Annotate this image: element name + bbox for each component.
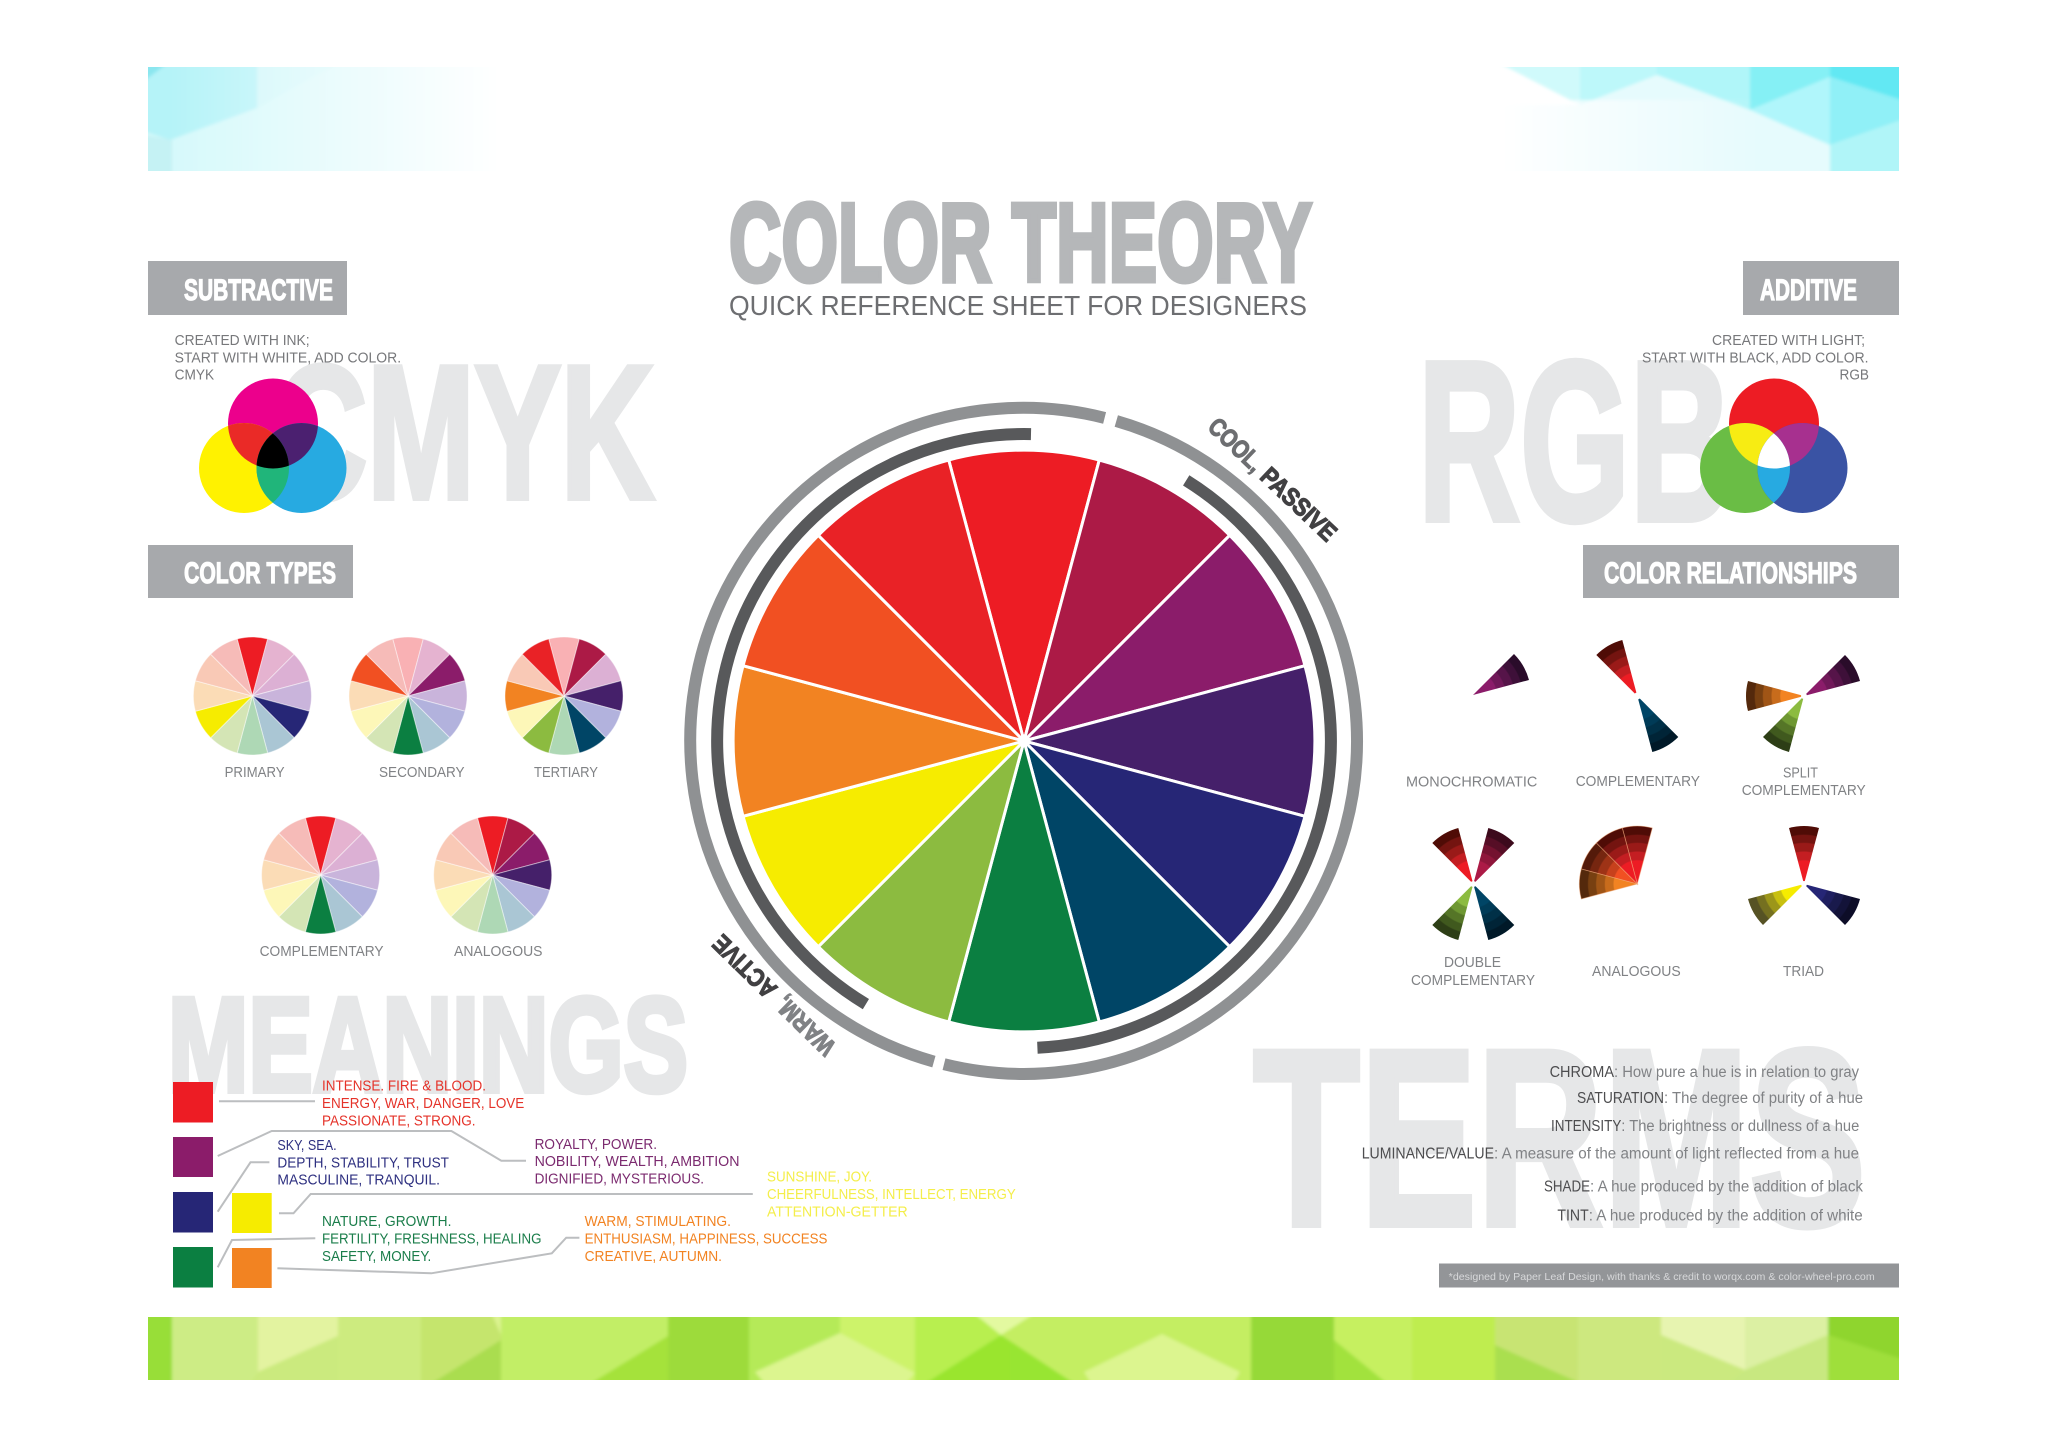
meaning text: yellow: SUNSHINE, JOY. (767, 1169, 872, 1186)
swatch: purple (173, 1137, 213, 1177)
meaning text: orange: ENTHUSIASM, HAPPINESS, SUCCESS (585, 1230, 827, 1247)
description: additive: START WITH BLACK, ADD COLOR. (1642, 350, 1868, 366)
description: subtractive: START WITH WHITE, ADD COLOR. (175, 350, 401, 366)
meaning text: yellow: CHEERFULNESS, INTELLECT, ENERGY (767, 1186, 1016, 1203)
credit bar (1439, 1264, 1899, 1288)
panel: subtractive (148, 261, 401, 513)
term: saturation (1577, 1090, 1863, 1107)
diagram: analogous: ANALOGOUS (1592, 963, 1681, 980)
meaning text: purple: DIGNIFIED, MYSTERIOUS. (535, 1170, 704, 1187)
description: additive: RGB (1840, 366, 1869, 384)
heading: color relationships (1583, 545, 1899, 598)
chart: complementary wheel (260, 816, 384, 960)
meaning text: yellow (767, 1169, 1016, 1221)
diagram: double complementary: COMPLEMENTARY (1411, 972, 1535, 989)
diagram: triad (1746, 826, 1862, 980)
meaning text: green (322, 1213, 542, 1265)
chart: complementary wheel: COMPLEMENTARY (260, 943, 384, 960)
meaning text: green: FERTILITY, FRESHNESS, HEALING (322, 1230, 542, 1247)
inner dark ring (717, 434, 1331, 1048)
chart: tertiary wheel (505, 637, 623, 781)
chart: analogous wheel: ANALOGOUS (454, 943, 542, 960)
description: additive (1642, 332, 1869, 384)
description: subtractive (175, 332, 401, 384)
meaning text: purple: NOBILITY, WEALTH, AMBITION (535, 1153, 740, 1170)
title (729, 181, 1312, 321)
ghost word: RGB: RGB (1418, 315, 1732, 569)
label: cool, passive: PASSIVE (1255, 462, 1342, 547)
swatch: green (173, 1247, 213, 1288)
meaning text: blue: MASCULINE, TRANQUIL. (277, 1171, 440, 1188)
meaning text: purple (535, 1136, 740, 1187)
swatch: blue (173, 1192, 213, 1232)
term: intensity: INTENSITY (1551, 1118, 1621, 1135)
chart: tertiary wheel: TERTIARY (534, 764, 598, 781)
meaning text: red: ENERGY, WAR, DANGER, LOVE (322, 1095, 524, 1112)
term: saturation: SATURATION (1577, 1090, 1664, 1107)
diagram: split complementary (1742, 654, 1866, 799)
diagram: monochromatic: MONOCHROMATIC (1406, 774, 1537, 791)
chart: primary wheel: PRIMARY (225, 764, 285, 781)
diagram: complementary (1576, 638, 1700, 790)
meaning text: yellow: ATTENTION-GETTER (767, 1204, 908, 1221)
term: intensity: : The brightness or dullness of a hue (1621, 1118, 1859, 1135)
panel: color relationships (1406, 545, 1899, 989)
top gradient band (148, 67, 1899, 171)
heading: additive (1743, 261, 1899, 315)
infographic canvas (148, 67, 1899, 1380)
meaning text: green: NATURE, GROWTH. (322, 1213, 451, 1230)
credit bar: *designed by Paper Leaf Design, with thanks & credit to worqx.com & color-wheel-pro.com (1449, 1271, 1875, 1283)
outer ring (690, 408, 1357, 1074)
description: subtractive: CREATED WITH INK; (175, 332, 310, 349)
diagram: analogous (1579, 826, 1681, 980)
meaning text: red (322, 1078, 524, 1130)
heading: color types: COLOR TYPES (184, 557, 336, 590)
meaning text: red: INTENSE. FIRE & BLOOD. (322, 1078, 486, 1095)
label: cool, passive (1202, 413, 1342, 547)
wheel wedges (733, 450, 1315, 1032)
meaning text: blue: DEPTH, STABILITY, TRUST (277, 1154, 449, 1171)
meaning text: orange (585, 1213, 827, 1265)
term: tint: TINT (1557, 1208, 1589, 1225)
meaning text: green: SAFETY, MONEY. (322, 1248, 431, 1265)
panel: additive (1642, 261, 1899, 513)
label: cool, passive: COOL, (1202, 413, 1269, 478)
heading: additive: ADDITIVE (1760, 274, 1857, 307)
meaning text: purple: ROYALTY, POWER. (535, 1136, 657, 1153)
description: subtractive: CMYK (175, 366, 214, 384)
term: chroma: : How pure a hue is in relation to gray (1614, 1064, 1859, 1081)
meaning text: blue: SKY, SEA. (277, 1137, 337, 1154)
meaning text: blue (277, 1137, 449, 1188)
label: warm, active (707, 929, 841, 1061)
subtitle: QUICK REFERENCE SHEET FOR DESIGNERS (729, 290, 1307, 321)
swatch: yellow (232, 1193, 272, 1233)
bottom gradient band (148, 1317, 1899, 1380)
diagram: double complementary: DOUBLE (1444, 954, 1501, 971)
panel: terms (1362, 1064, 1863, 1225)
chart: secondary wheel (349, 637, 467, 781)
term: saturation: : The degree of purity of a hue (1664, 1090, 1863, 1107)
diagram: split complementary: COMPLEMENTARY (1742, 782, 1866, 799)
connector lines (218, 1101, 753, 1273)
diagram: complementary: COMPLEMENTARY (1576, 773, 1700, 790)
title: COLOR THEORY (729, 181, 1312, 305)
term: tint: : A hue produced by the addition of white (1589, 1208, 1863, 1225)
diagram: RGB overlapping circles (1700, 378, 1848, 513)
diagram: double complementary (1411, 826, 1535, 989)
term: chroma: CHROMA (1550, 1064, 1615, 1081)
chart: analogous wheel (434, 816, 552, 960)
term: luminance/value: : A measure of the amount of light reflected from a hue (1494, 1145, 1859, 1162)
description: additive: CREATED WITH LIGHT; (1712, 332, 1865, 349)
swatch: red (173, 1082, 213, 1122)
term: luminance/value: LUMINANCE/VALUE (1362, 1145, 1494, 1162)
diagram: triad: TRIAD (1783, 963, 1824, 980)
diagram: monochromatic (1406, 653, 1537, 791)
ghost word: CMYK: CMYK (274, 327, 654, 539)
main color wheel (690, 408, 1357, 1074)
meaning text: orange: CREATIVE, AUTUMN. (585, 1248, 722, 1265)
chart: secondary wheel: SECONDARY (379, 764, 465, 781)
meaning text: red: PASSIONATE, STRONG. (322, 1113, 476, 1130)
heading: color types (148, 545, 353, 598)
label: warm, active: ACTIVE (707, 929, 783, 1003)
meaning text: orange: WARM, STIMULATING. (585, 1213, 731, 1230)
diagram: CMYK overlapping circles (199, 378, 346, 513)
ghost word: MEANINGS: MEANINGS (168, 971, 688, 1120)
swatch: orange (232, 1248, 272, 1288)
label: warm, active: WARM, (770, 990, 841, 1061)
panel: meanings (173, 1078, 1016, 1288)
panel: color types (148, 545, 623, 960)
heading: subtractive (148, 261, 347, 315)
heading: subtractive: SUBTRACTIVE (184, 274, 333, 307)
term: shade: : A hue produced by the addition of black (1590, 1179, 1863, 1196)
term: shade: SHADE (1544, 1179, 1590, 1196)
diagram: split complementary: SPLIT (1783, 765, 1818, 782)
chart: primary wheel (193, 637, 311, 781)
heading: color relationships: COLOR RELATIONSHIPS (1604, 557, 1857, 590)
